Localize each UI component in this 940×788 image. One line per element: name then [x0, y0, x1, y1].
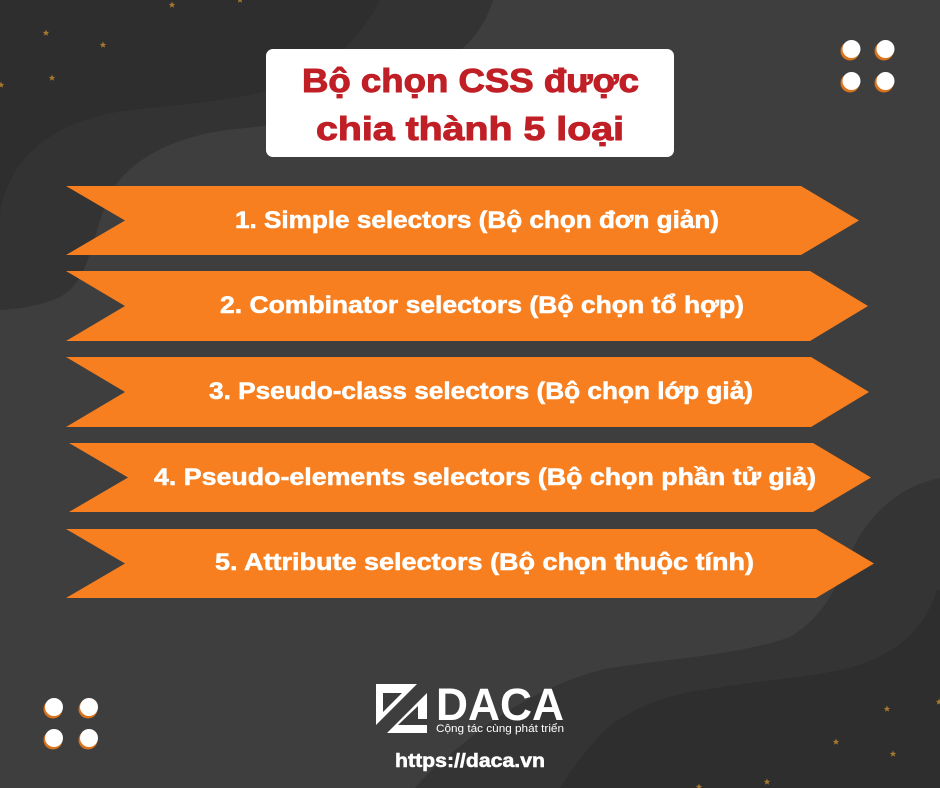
arrow 3	[66, 357, 869, 427]
title	[302, 63, 639, 148]
dots: bottom left	[44, 698, 98, 750]
arrow 3: 3. Pseudo-class selectors (Bộ chọn lớp giả)	[209, 378, 753, 405]
arrow 2: 2. Combinator selectors (Bộ chọn tổ hợp)	[220, 292, 744, 319]
arrow 2	[66, 271, 868, 341]
title panel	[266, 49, 674, 157]
arrow 4: 4. Pseudo-elements selectors (Bộ chọn phần tử giả)	[154, 464, 816, 491]
title: Bộ chọn CSS được	[302, 63, 639, 100]
decorative stars: bottom right	[696, 698, 940, 788]
logo wordmark: DACA	[436, 679, 564, 730]
logo tagline: Cộng tác cùng phát triển	[436, 723, 564, 735]
logo	[376, 679, 564, 735]
website url: https://daca.vn	[395, 751, 545, 772]
dots: top right	[840, 40, 894, 92]
arrow 4	[69, 443, 871, 512]
decorative stars: top left	[0, 0, 243, 88]
icon: DACA mark	[376, 684, 428, 733]
arrow 1: 1. Simple selectors (Bộ chọn đơn giản)	[235, 207, 719, 234]
title: chia thành 5 loại	[316, 111, 624, 148]
arrow 5: 5. Attribute selectors (Bộ chọn thuộc tính)	[215, 549, 754, 576]
arrow 5	[66, 529, 874, 598]
arrow 1	[66, 186, 859, 255]
